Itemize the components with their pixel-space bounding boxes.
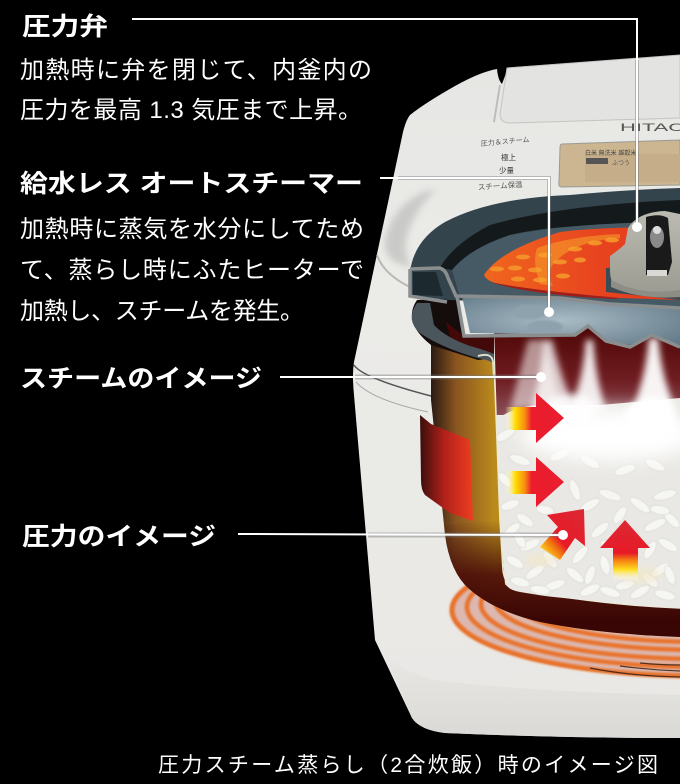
control labels: 圧力＆スチーム [480, 135, 530, 148]
arrow: upward [600, 520, 650, 580]
steam chamber [462, 296, 680, 345]
text: auto steamer description: 加熱時に蒸気を水分にしてため [20, 216, 364, 243]
steam-pressure arrows [505, 393, 650, 580]
text: pressure valve description: 圧力を最高 1.3 気圧まで上昇。 [20, 97, 362, 124]
lid metal section [410, 268, 680, 347]
induction coil [448, 566, 680, 680]
text: auto steamer description: て、蒸らし時にふたヒーターで [20, 257, 364, 284]
steam plumes [506, 334, 677, 420]
pot rim [412, 303, 494, 364]
control labels: 極上 [501, 152, 516, 162]
inner pot liner [494, 360, 680, 608]
display panel: ふつう [612, 160, 630, 167]
display panel: 白米 無洗米 雑穀米 [585, 149, 636, 157]
rice cooker body [353, 55, 680, 738]
callout: steam line [280, 372, 546, 382]
callout: pressure line [238, 530, 568, 540]
heading: pressure valve: 圧力弁 [22, 13, 108, 41]
text: auto steamer description: 加熱し、スチームを発生。 [20, 298, 304, 325]
control labels: 少量 [499, 165, 514, 175]
heading: pressure image: 圧力のイメージ [22, 523, 216, 551]
arrow: diagonal [540, 509, 585, 560]
lid rim [410, 188, 680, 310]
heater plate [484, 228, 680, 300]
text: auto steamer description [20, 216, 364, 325]
display panel [559, 140, 680, 187]
control labels: スチーム保温 [478, 180, 523, 192]
lid top panel [500, 55, 680, 123]
text: pressure valve description: 加熱時に弁を閉じて、内釜内の [20, 57, 372, 84]
heater on pot side [420, 415, 473, 521]
arrow: upper horizontal [505, 393, 564, 443]
caption: 圧力スチーム蒸らし（2合炊飯）時のイメージ図 [158, 754, 658, 777]
shadow behind lid [412, 298, 494, 360]
callout: pressure valve line [132, 19, 642, 232]
lid assembly [410, 188, 680, 378]
brand name: HITACHI [620, 122, 680, 134]
control labels [478, 135, 530, 192]
callout: auto steamer line [380, 178, 554, 317]
text: pressure valve description [20, 57, 372, 124]
rice [493, 398, 680, 610]
pot interior [493, 325, 680, 610]
heading: steam image: スチームのイメージ [20, 365, 262, 393]
arrow: lower horizontal [505, 457, 564, 507]
inner pot cross-section [431, 345, 680, 637]
inner lid plate [452, 222, 680, 310]
lid groove [440, 200, 680, 270]
pressure valve [606, 211, 680, 300]
heading: auto steamer: 給水レス オートスチーマー [20, 170, 363, 198]
